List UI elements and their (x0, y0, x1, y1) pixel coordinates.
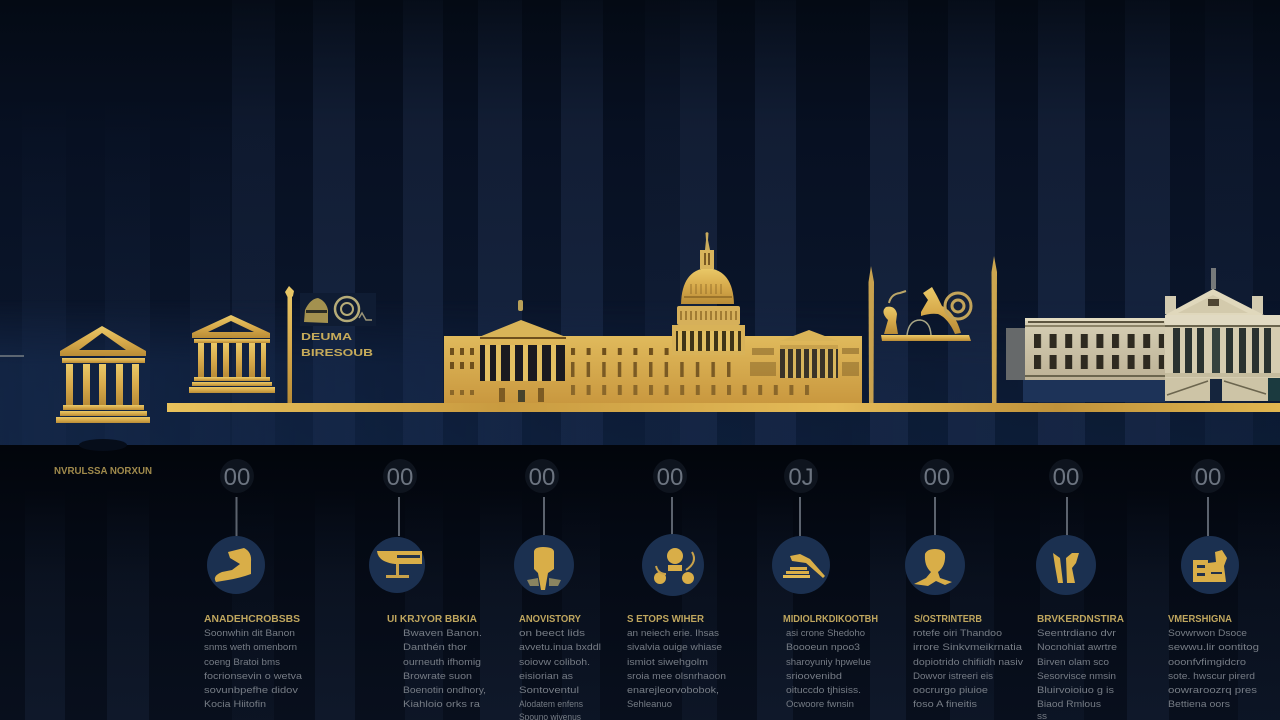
icon: document and seal (1181, 536, 1239, 594)
left annex (1006, 328, 1026, 380)
body text: rotefe oiri Thandoo (913, 628, 1002, 639)
body text: irrore Sinkvmeikrnatia (913, 642, 1023, 653)
body text: ooonfvfimgidcro (1168, 657, 1246, 668)
roof staff (1211, 268, 1216, 289)
body text: avvetu.inua bxddl (519, 642, 601, 653)
body text: Boooeun npoo3 (786, 642, 860, 653)
body text (627, 628, 726, 710)
body text (519, 628, 601, 720)
body text: snms weth omenborn (204, 642, 297, 653)
number badge (784, 459, 818, 493)
body text: focrionsevin o wetva (204, 671, 303, 682)
body text (204, 628, 303, 710)
body text: Biaod Rmlous (1037, 699, 1101, 710)
step 5 (772, 459, 878, 710)
body text: Boenotin ondhory, (403, 685, 486, 696)
body text: sewwu.lir oontitog (1168, 642, 1259, 653)
number badge: 00 (924, 464, 950, 491)
body text: dopiotrido chifiidh nasiv (913, 657, 1023, 668)
step 6 (905, 459, 1023, 710)
obelisk marker: right (992, 256, 997, 403)
heading: S ETOPS WIHER (627, 614, 705, 625)
body text: sovunbpefhe didov (204, 685, 298, 696)
icon: gavel (772, 536, 830, 594)
body text: Danthén thor (403, 642, 467, 653)
body text: soiovw coliboh. (519, 657, 590, 668)
number badge (383, 459, 417, 493)
step 2 (369, 459, 486, 710)
temple icon: left (56, 326, 150, 423)
wing windows (1034, 334, 1164, 370)
milestone label: small icons and caption: DEUMA (301, 331, 353, 343)
body text: Alodatem enfens (519, 699, 583, 710)
body text: Nocnohiat awrtre (1037, 642, 1117, 653)
body text: sroia mee olsnrhaoon (627, 671, 726, 682)
obelisk marker: left (285, 286, 294, 403)
body text: Kiahloio orks ra (403, 699, 481, 710)
body text: oowraroozrq pres (1168, 685, 1257, 696)
number badge (220, 459, 254, 493)
heading: ANADEHCROBSBS (204, 614, 300, 625)
heading: S/OSTRINTERB (914, 614, 982, 625)
body text: Ocwoore fwnsin (786, 699, 854, 710)
icon: bundle (1036, 535, 1096, 595)
temple icon: second (189, 315, 275, 393)
milestone label: small icons and caption: BIRESOUB (301, 347, 374, 359)
milestone label: small icons and caption (300, 293, 376, 359)
step 1 (204, 459, 303, 710)
body text: srioovenibd (786, 671, 842, 682)
body text: oituccdo tjhisiss. (786, 685, 861, 696)
portico (1165, 315, 1280, 378)
body text: Soonwhin dit Banon (204, 628, 295, 639)
body text (403, 628, 486, 710)
heading: UI KRJYOR BBKIA (387, 614, 477, 625)
heading: MIDIOLRKDIKOOTBH (783, 614, 878, 625)
baseline timeline bar (167, 403, 1280, 412)
icon: statue (905, 535, 965, 595)
body text: Sontoventul (519, 685, 579, 696)
body text: Seentrdiano dvr (1037, 628, 1116, 639)
number badge (1049, 459, 1083, 493)
step 4 (627, 459, 726, 710)
body text: Birven olam sco (1037, 657, 1109, 668)
background: upper striped panel (0, 0, 1280, 445)
number badge: 00 (224, 464, 250, 491)
body text: Bluirvoioiuo g is (1037, 685, 1114, 696)
body text: an neiech erie. Ihsas (627, 628, 719, 639)
body text (1168, 628, 1259, 710)
body text: Sehleanuo (627, 699, 672, 710)
heading: BRVKERDNSTIRA (1037, 614, 1124, 625)
chimneys (1165, 296, 1176, 314)
body text (913, 628, 1023, 710)
body text: Kocia Hiitofin (204, 699, 266, 710)
plinth shadow (1023, 380, 1165, 402)
body text: Bwaven Banon. (403, 628, 482, 639)
body text (786, 628, 871, 710)
body text: ourneuth ifhomig (403, 657, 481, 668)
pediment (1165, 289, 1264, 315)
capitol left portico (479, 320, 566, 402)
white neoclassical building (1006, 268, 1280, 402)
body text: Bettiena oors (1168, 699, 1230, 710)
body text: eisiorian as (519, 671, 573, 682)
step 8 (1168, 459, 1259, 710)
body text: Browrate suon (403, 671, 472, 682)
background: lower striped panel (0, 439, 1280, 720)
body text: Sovwrwon Dsoce (1168, 628, 1247, 639)
capitol dome (672, 232, 745, 355)
body text: sharoyuniy hpwelue (786, 657, 871, 668)
obelisk marker: center right (868, 266, 874, 403)
body text (1037, 628, 1117, 720)
number badge: 00 (657, 464, 683, 491)
body text: Sesorvisce nmsin (1037, 671, 1116, 682)
number badge: 0J (788, 464, 814, 491)
heading: VMERSHIGNA (1168, 614, 1232, 625)
number badge: 00 (529, 464, 555, 491)
capitol body (444, 336, 862, 403)
step 7 (1036, 459, 1124, 720)
number badge: 00 (387, 464, 413, 491)
capitol right portico (780, 330, 838, 378)
icon: rostrum (369, 537, 425, 593)
left caption: NVRULSSA NORXUN (54, 465, 152, 477)
capitol windows (450, 348, 859, 395)
body text: ismiot siwehgolm (627, 657, 708, 668)
body text: asi crone Shedoho (786, 628, 865, 639)
body text: enarejleorvobobok, (627, 685, 719, 696)
icon: figures (642, 534, 704, 596)
number badge: 00 (1053, 464, 1079, 491)
heading: ANOVISTORY (519, 614, 581, 625)
number badge (653, 459, 687, 493)
body text: sivalvia ouige whiase (627, 642, 722, 653)
body text: on beect lids (519, 628, 585, 639)
number badge: 00 (1195, 464, 1221, 491)
icon: bust (514, 535, 574, 595)
number badge (1191, 459, 1225, 493)
icon: ornament (207, 536, 265, 594)
capitol finial (518, 300, 523, 311)
milestone icon: desk ornament (881, 287, 971, 341)
lower storey and door (1165, 378, 1268, 401)
body text: oocrurgo piuioe (913, 685, 988, 696)
body text: sote. hwscur pirerd (1168, 671, 1255, 682)
body text: Dowvor istreeri eis (913, 671, 993, 682)
number badge (525, 459, 559, 493)
body text: coeng Bratoi bms (204, 657, 280, 668)
number badge (920, 459, 954, 493)
body text: foso A fineitis (913, 699, 977, 710)
step 3 (514, 459, 601, 720)
main wing (1025, 318, 1165, 380)
capitol building (444, 232, 862, 403)
